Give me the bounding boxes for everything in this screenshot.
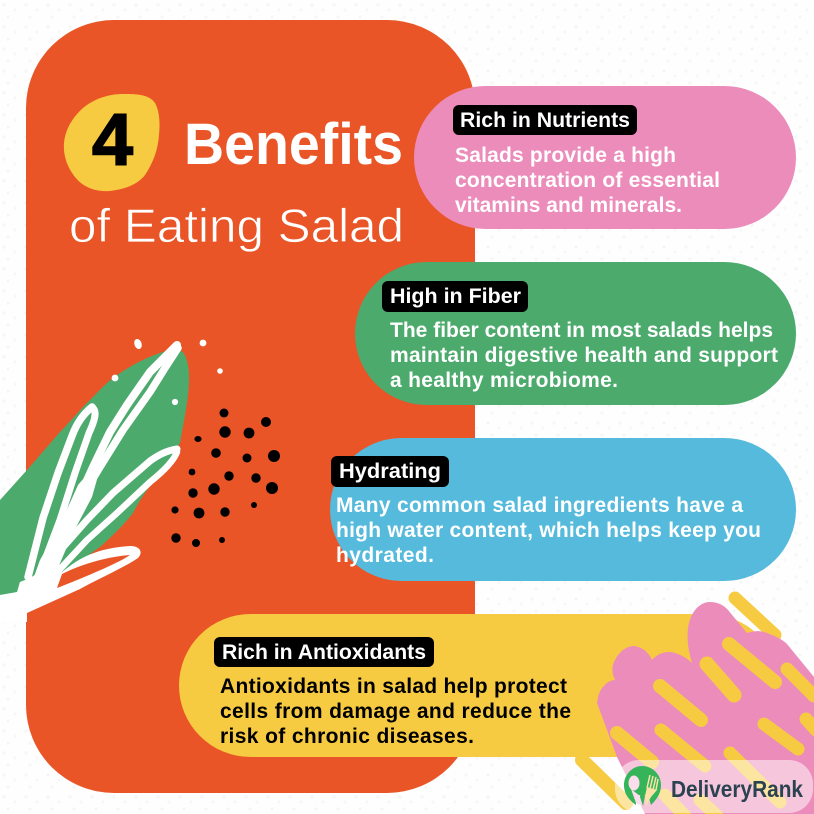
leaf illustration (0, 338, 223, 622)
label: Hydrating (331, 456, 449, 487)
panel: Hydrating (330, 438, 796, 581)
description: nutrients: Salads provide a high (455, 144, 676, 167)
heading: of Eating Salad: of Eating Salad (69, 199, 404, 252)
description: nutrients: concentration of essential (455, 169, 720, 192)
logo: DeliveryRank (615, 760, 813, 813)
description: antioxidants (220, 675, 571, 748)
yellow blob behind number (64, 94, 160, 191)
description: fiber (390, 319, 778, 392)
label: Rich in Antioxidants: Rich in Antioxidants (222, 641, 426, 664)
description: fiber: maintain digestive health and support (390, 344, 778, 367)
white main stem (30, 455, 104, 588)
label: High in Fiber (382, 281, 528, 312)
description: antioxidants: cells from damage and reduce the (220, 700, 571, 723)
panel: Rich in Antioxidants (179, 614, 779, 757)
lower loop opening (57, 555, 130, 588)
description: hydrating: Many common salad ingredients have a (336, 494, 743, 517)
heading: Benefits: Benefits (184, 112, 403, 177)
panel: Rich in Nutrients (414, 86, 796, 229)
description: hydrating: hydrated. (336, 544, 434, 567)
description: hydrating (336, 494, 761, 567)
label: High in Fiber: High in Fiber (390, 285, 521, 308)
white leaf strokes (28, 345, 178, 582)
decorative brush: yellow strokes behind pink (582, 598, 775, 803)
white leaf base (0, 560, 80, 622)
black dot cluster (171, 408, 280, 547)
logo wordmark: DeliveryRank (671, 776, 803, 802)
panel: High in Fiber (355, 262, 796, 405)
label: Hydrating: Hydrating (339, 460, 441, 483)
description: nutrients: vitamins and minerals. (455, 194, 682, 217)
title (64, 94, 404, 252)
description: fiber: The fiber content in most salads helps (390, 319, 773, 342)
description: fiber: a healthy microbiome. (390, 369, 618, 392)
logo icon (624, 766, 661, 806)
decorative brush: yellow strokes over pink (617, 644, 814, 814)
label: Rich in Nutrients: Rich in Nutrients (460, 109, 630, 132)
description: antioxidants: Antioxidants in salad help protect (220, 675, 567, 698)
green leaf (0, 350, 189, 595)
description: hydrating: high water content, which helps keep you (336, 519, 761, 542)
panel: orange background (26, 20, 475, 793)
decorative brush: pink shape (597, 602, 814, 814)
description: nutrients (455, 144, 720, 217)
logo pill (615, 760, 813, 813)
number 4: 4 (92, 100, 133, 181)
white accent dots (112, 338, 223, 405)
description: antioxidants: risk of chronic diseases. (220, 725, 474, 748)
lower loop (45, 546, 141, 598)
